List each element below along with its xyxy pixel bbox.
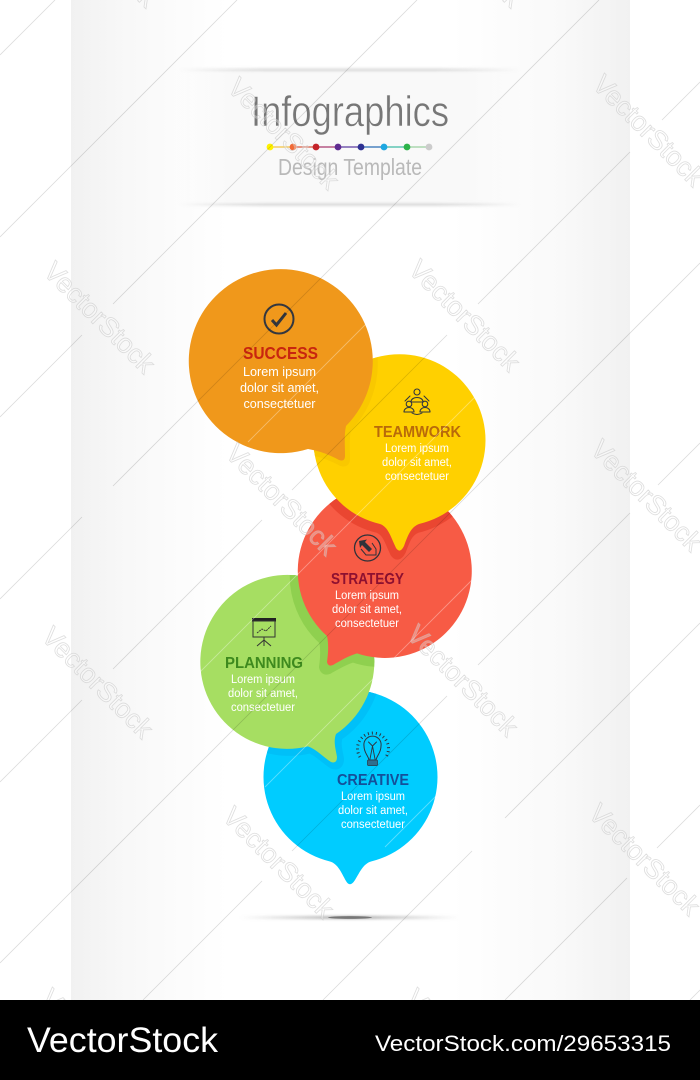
watermarks: VectorStock	[38, 256, 161, 379]
text: creative: dolor sit amet,	[338, 805, 408, 817]
text: planning: Lorem ipsum	[231, 674, 295, 686]
ground shadow	[240, 916, 460, 919]
watermarks: VectorStock	[401, 619, 524, 742]
text: teamwork: dolor sit amet,	[382, 457, 452, 469]
heading: teamwork: TEAMWORK	[374, 424, 461, 441]
bubble: planning	[200, 574, 374, 762]
icon: strategy arrows	[354, 535, 380, 561]
bubble: strategy	[298, 498, 472, 666]
title text: Infographics	[251, 88, 449, 136]
footer brand: VectorStock	[27, 1021, 219, 1060]
icon: presentation board	[252, 618, 276, 646]
background panel	[71, 0, 630, 1000]
heading	[251, 88, 449, 180]
text: creative: Lorem ipsum	[341, 791, 405, 803]
icon: check mark	[264, 304, 294, 334]
text: strategy: consectetuer	[335, 618, 399, 630]
heading: strategy: STRATEGY	[331, 571, 404, 588]
title plate	[175, 68, 525, 206]
text: strategy: dolor sit amet,	[332, 604, 402, 616]
bubble: teamwork	[314, 354, 486, 551]
text: teamwork	[382, 443, 452, 483]
text: planning: consectetuer	[231, 702, 295, 714]
bubble: success	[189, 269, 373, 460]
text: strategy: Lorem ipsum	[335, 590, 399, 602]
icon: team	[404, 389, 430, 414]
heading: creative: CREATIVE	[337, 772, 409, 789]
text: strategy	[332, 590, 402, 630]
watermarks: VectorStock	[36, 621, 159, 744]
text: success: dolor sit amet,	[240, 380, 319, 395]
text: creative: consectetuer	[341, 819, 405, 831]
heading: planning: PLANNING	[225, 655, 303, 672]
heading: success: SUCCESS	[243, 343, 318, 363]
text: success: Lorem ipsum	[243, 364, 316, 379]
text: success	[240, 364, 319, 411]
text: success: consectetuer	[244, 396, 316, 411]
text: planning: dolor sit amet,	[228, 688, 298, 700]
footer bar	[0, 1000, 700, 1080]
watermarks: VectorStock	[217, 801, 340, 924]
footer image id: VectorStock.com/29653315	[375, 1031, 671, 1056]
coloured dot line	[267, 144, 432, 150]
watermarks: VectorStock	[403, 254, 526, 377]
bubble: creative	[264, 692, 438, 884]
icon: light bulb	[357, 733, 388, 766]
watermarks: VectorStock	[222, 72, 345, 195]
text: planning	[228, 674, 298, 714]
text: teamwork: Lorem ipsum	[385, 443, 449, 455]
text: teamwork: consectetuer	[385, 471, 449, 483]
watermarks: VectorStock	[220, 438, 343, 561]
subtitle text: Design Template	[278, 154, 422, 180]
text: creative	[338, 791, 408, 831]
